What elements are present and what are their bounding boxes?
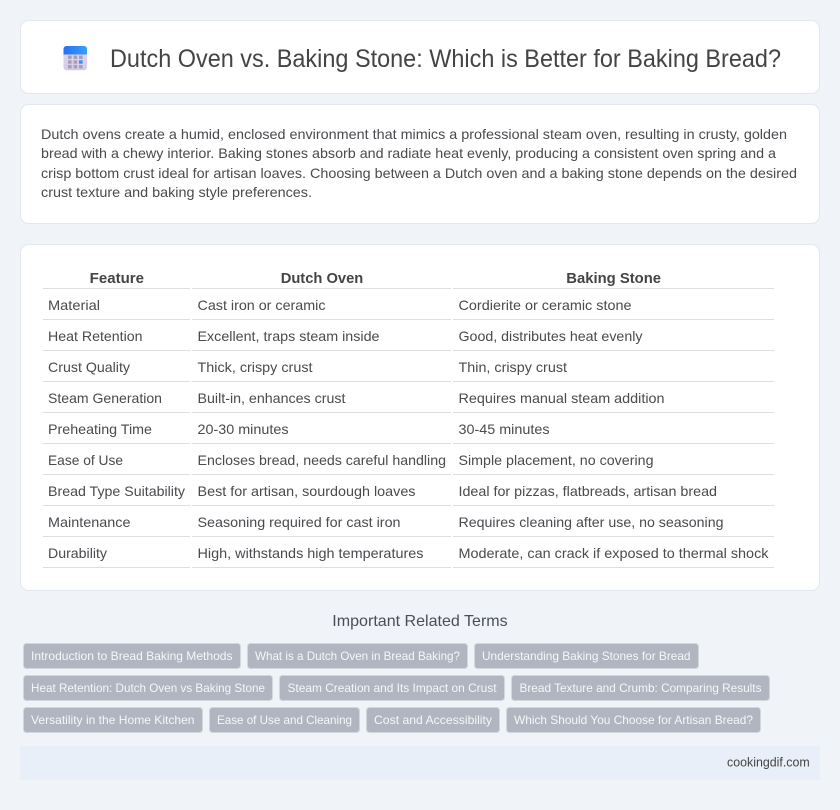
tag: Versatility in the Home Kitchen: [31, 713, 194, 727]
icon: calendar: [64, 46, 87, 70]
table row: bread type suitability: [48, 483, 717, 499]
table row: steam generation: Steam Generation: [48, 390, 162, 406]
table header row: Feature: [90, 270, 144, 287]
tag: Cost and Accessibility: [374, 713, 492, 727]
tag: [506, 708, 760, 732]
tag: [512, 676, 770, 700]
tag: Bread Texture and Crumb: Comparing Results: [520, 681, 762, 695]
table row: heat retention: [48, 328, 642, 344]
table row: heat retention: Heat Retention: [48, 328, 142, 344]
table row: preheating time: [48, 421, 550, 437]
table row: maintenance: Requires cleaning after use, no seasoning: [458, 514, 724, 530]
tag: [24, 708, 202, 732]
footer source text: cookingdif.com: [727, 756, 810, 770]
table row: crust quality: Thick, crispy crust: [198, 359, 313, 375]
tag: [24, 644, 240, 668]
table row: durability: Moderate, can crack if exposed to thermal shock: [458, 545, 770, 561]
table row: maintenance: [48, 514, 724, 530]
table row: preheating time: 30-45 minutes: [458, 421, 550, 437]
table row: crust quality: [48, 359, 567, 375]
title: Dutch Oven vs. Baking Stone: Which is Better for Baking Bread?: [110, 45, 781, 73]
panel: introduction: [20, 104, 820, 224]
table row: ease of use: Simple placement, no covering: [458, 452, 654, 468]
table row: crust quality: Thin, crispy crust: [458, 359, 567, 375]
table row: preheating time: 20-30 minutes: [198, 421, 288, 437]
table row: durability: [48, 545, 770, 561]
tag: Ease of Use and Cleaning: [217, 713, 352, 727]
table row: bread type suitability: Ideal for pizzas, flatbreads, artisan bread: [458, 483, 717, 499]
table row: ease of use: Encloses bread, needs careful handling: [198, 452, 446, 468]
table row: durability: Durability: [48, 545, 107, 561]
tag: [366, 708, 500, 732]
panel: related term tags: [24, 644, 770, 732]
table row: bread type suitability: Bread Type Suitability: [48, 483, 185, 499]
table row: steam generation: [48, 390, 664, 406]
table row: heat retention: Excellent, traps steam inside: [198, 328, 380, 344]
text block: introduction paragraph: [41, 126, 797, 200]
tag: Steam Creation and Its Impact on Crust: [288, 681, 497, 695]
table header row: Dutch Oven: [281, 270, 363, 287]
text block: introduction paragraph: Dutch ovens create a humid, enclosed environment that mimics a professional steam oven, resulting in crusty, golden: [41, 126, 787, 142]
table row: crust quality: Crust Quality: [48, 359, 130, 375]
tag: [24, 676, 272, 700]
table row: steam generation: Requires manual steam addition: [458, 390, 664, 406]
table row: preheating time: Preheating Time: [48, 421, 152, 437]
heading: important related terms: Important Related Terms: [332, 613, 508, 630]
text block: introduction paragraph: bread with a chewy interior. Baking stones absorb and radiate heat evenly, producing a consistent oven spring and a: [41, 145, 776, 161]
tag: Introduction to Bread Baking Methods: [31, 649, 232, 663]
table row: steam generation: Built-in, enhances crust: [198, 390, 346, 406]
footer: [20, 746, 820, 780]
table row: heat retention: Good, distributes heat evenly: [458, 328, 642, 344]
tag: [210, 708, 360, 732]
panel: comparison table: [20, 244, 820, 590]
tag: [474, 644, 698, 668]
table row: material: [48, 297, 632, 313]
table row: ease of use: [48, 452, 654, 468]
table row: maintenance: Maintenance: [48, 514, 131, 530]
text block: introduction paragraph: crisp bottom crust ideal for artisan loaves. Choosing between a Dutch oven and a baking stone depends on the desired: [41, 165, 797, 181]
table row: material: Cast iron or ceramic: [198, 297, 326, 313]
tag: [248, 644, 468, 668]
text block: introduction paragraph: crust texture and baking style preferences.: [41, 184, 312, 200]
tag: Heat Retention: Dutch Oven vs Baking Stone: [31, 681, 265, 695]
tag: Understanding Baking Stones for Bread: [482, 649, 690, 663]
table row: maintenance: Seasoning required for cast iron: [198, 514, 400, 530]
table row: durability: High, withstands high temperatures: [198, 545, 424, 561]
table row: ease of use: Ease of Use: [48, 452, 123, 468]
table header row: Baking Stone: [566, 270, 661, 287]
table header row: [90, 270, 661, 287]
table row: material: Material: [48, 297, 100, 313]
tag: What is a Dutch Oven in Bread Baking?: [255, 649, 460, 663]
tag: [280, 676, 504, 700]
tag: Which Should You Choose for Artisan Bread?: [514, 713, 753, 727]
panel: title header: [20, 20, 820, 94]
table row: bread type suitability: Best for artisan, sourdough loaves: [198, 483, 416, 499]
table row: material: Cordierite or ceramic stone: [458, 297, 632, 313]
